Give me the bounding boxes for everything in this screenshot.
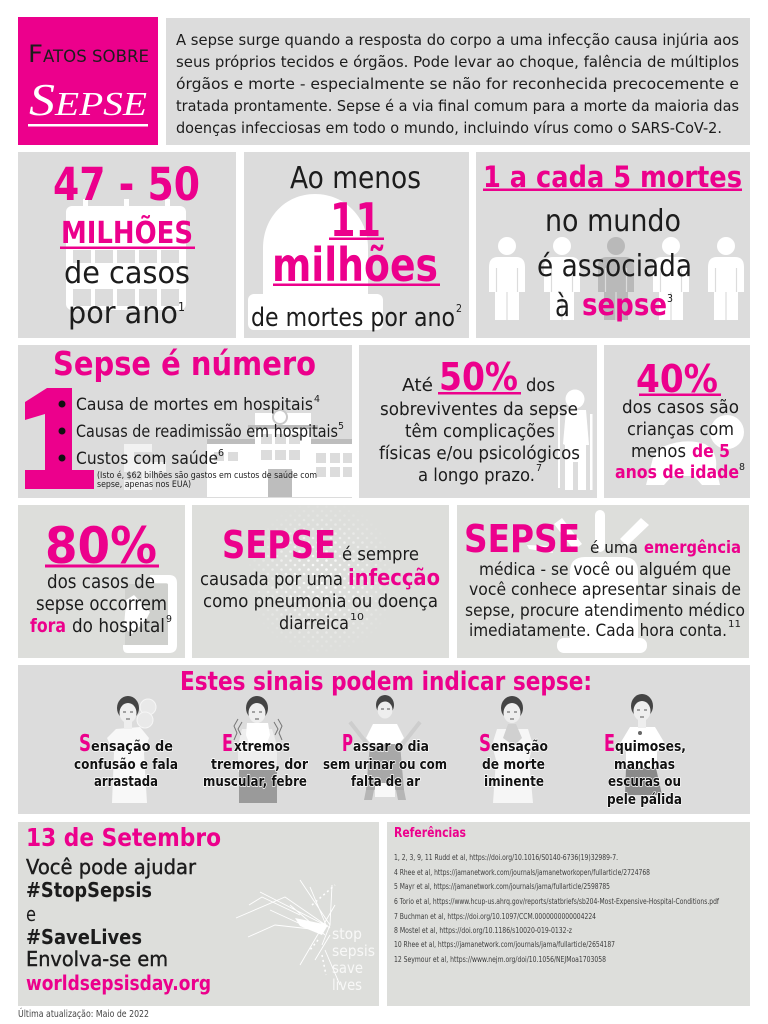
label: passar o dia: sem urinar ou com [323,757,447,773]
label: confusão: ensação de [91,739,173,755]
label: equimoses: E [604,731,615,757]
panel: Até 50% dos sobreviventes: 7 [536,463,542,474]
icon: calendar [66,199,186,310]
panel: introduction text [166,18,750,145]
panel: warning signs [18,665,750,814]
label: confusão: S [79,731,91,757]
panel: 1 a cada 5 mortes: sepse [582,288,667,323]
panel: Até 50% dos sobreviventes: têm complicações [405,421,555,442]
panel: 40% crianças: 40% [636,357,718,401]
panel: 80% fora do hospital: 9 [166,614,172,625]
label: extremos: xtremos [234,739,290,755]
panel: 40% crianças: anos de idade [615,462,739,483]
panel: 11 milhões de mortes: Ao menos [290,161,421,196]
figure: shivering [234,696,282,803]
label: passar o dia: falta de ar [351,774,421,790]
panel: 1 a cada 5 mortes: à [555,289,570,324]
panel: 80% fora do hospital [18,505,185,658]
list: ranking: 4 [314,394,320,405]
panel: Até 50% dos sobreviventes: dos [526,375,555,396]
panel: 47-50 milhões de casos: 47 - 50 [53,158,200,211]
panel: 80% fora do hospital: 80% [45,517,157,575]
panel: 1 a cada 5 mortes [476,152,750,338]
panel: 1 a cada 5 mortes: 3 [667,292,673,305]
panel: references: 10 Rhee et al, https://jamanetwork.com/journals/jama/fullarticle/2654187 [394,940,615,949]
panel: references: 5 Mayr et al, https://jamanetwork.com/journals/jama/fullarticle/2598785 [394,882,610,891]
panel: references [387,822,750,1006]
icon: five people [489,237,744,320]
icon: stop sepsis splash logo: sepsis [332,942,375,960]
panel: 40% crianças [604,345,750,498]
footer: last update: Última atualização: Maio de 2022 [18,1008,149,1020]
panel: 40% crianças: menos [631,441,686,462]
label: sensação de morte: iminente [484,774,544,790]
label: extremos [203,731,309,790]
label: extremos: muscular, febre [203,774,307,790]
panel: sepse causada por infecção: 10 [350,612,364,623]
label: equimoses: pele pálida [607,792,682,808]
label: extremos: E [222,731,233,757]
halftone dots [262,516,382,638]
title panel: Fatos sobre Sepse: ATOS SOBRE [43,47,149,67]
panel: 47-50 milhões de casos: por ano [68,296,178,331]
panel: 13 de Setembro call to action: worldsepsisday.org [26,971,211,995]
panel: Até 50% dos sobreviventes: Até [402,375,433,396]
label: sensação de morte [479,731,548,790]
panel: Até 50% dos sobreviventes: sobreviventes da sepse [380,399,578,420]
panel: 13 de Setembro call to action: #StopSepsis [26,878,152,902]
label: confusão: confusão e fala [74,757,178,773]
panel: Até 50% dos sobreviventes: a longo prazo. [418,465,535,486]
icon: phone frame [123,575,177,653]
icon: siren [527,510,649,653]
figure: impending doom [492,696,533,803]
panel: references: 4 Rhee et al, https://jamanetwork.com/journals/jamanetworkopen/fullarticle/2724768 [394,868,650,877]
panel: 11 milhões de mortes: 2 [456,302,462,315]
panel: 47-50 milhões de casos: 1 [178,300,185,314]
list: ranking: 5 [338,421,344,432]
label: equimoses [604,731,686,808]
panel: 13 de Setembro call to action: Envolva-se em [26,947,168,971]
panel: introduction text: doenças infecciosas em todo o mundo, incluindo vírus como o SARS-CoV-2. [176,119,722,137]
panel: 13 de Setembro call to action: 13 de Setembro [26,823,221,852]
panel: sepse causada por infecção: infecção [348,566,440,591]
panel: introduction text: tratada prontamente. Sepse é a via final comum para a morte da maioria das [176,97,739,115]
title panel: Fatos sobre Sepse [18,17,158,145]
panel: 1 a cada 5 mortes: 1 a cada 5 mortes [483,160,742,194]
label: sensação de morte: de morte [482,757,545,773]
panel: 80% fora do hospital: dos casos de [47,571,155,593]
panel: references: 1, 2, 3, 9, 11 Rudd et al, https://doi.org/10.1016/S0140-6736(19)32989-7. [394,853,618,862]
panel: sepse é uma emergência: é uma [590,538,638,557]
panel: sepse é uma emergência: sepse, procure atendimento médico [465,601,745,621]
panel: 1 a cada 5 mortes: é associada [537,249,692,284]
list: ranking: Causa de mortes em hospitais [76,395,313,415]
panel: 80% fora do hospital: fora [30,615,66,637]
panel: 40% crianças: crianças com [627,419,734,440]
label: passar o dia: assar o dia [353,739,429,755]
icon: stop sepsis splash logo: save [332,959,363,977]
panel: Até 50% dos sobreviventes [359,345,597,498]
icon: tombstone [248,194,383,330]
title panel: Fatos sobre Sepse: EPSE [54,86,147,123]
icon: crawling child [646,415,744,485]
panel: Até 50% dos sobreviventes: físicas e/ou psicológicos [379,443,580,464]
panel: 80% fora do hospital: sepse occorrem [36,593,167,615]
panel: 11 milhões de mortes: 11 [330,193,381,247]
panel: sepse causada por infecção: como pneumonia ou doença [203,591,438,612]
panel: introduction text: A sepse surge quando a resposta do corpo a uma infecção causa injúria aos [176,31,739,49]
panel: 47-50 milhões de casos [18,152,236,338]
figure: bruising [621,694,664,795]
panel: introduction text: órgãos e morte - especialmente se não for reconhecida precocemente e [176,75,739,93]
panel: 80% fora do hospital: do hospital [72,615,165,637]
panel: 40% crianças: de 5 [692,441,730,462]
list: ranking: (Isto é, $62 bilhões são gastos em custos de saúde com [97,470,317,481]
panel: 13 de Setembro call to action [18,822,379,1006]
label: confusão: arrastada [94,774,158,790]
panel: 13 de Setembro call to action: #SaveLives [26,925,142,949]
panel: references: Referências [394,826,466,841]
panel: Até 50% dos sobreviventes: 50% [439,355,518,399]
panel: sepse é uma emergência: SEPSE [464,517,580,561]
panel: 11 milhões de mortes: milhões [272,238,438,292]
panel: references: 12 Seymour et al, https://www.nejm.org/doi/10.1056/NEJMoa1703058 [394,955,606,964]
panel: Sepse é número 1: Sepse é número [53,344,316,383]
title panel: Fatos sobre Sepse: F [28,40,43,68]
list: ranking: 6 [218,448,224,459]
label: passar o dia [323,731,447,790]
list: ranking: Custos com saúde [76,449,218,469]
icon: person on crutches [558,390,592,490]
panel: sepse causada por infecção [192,505,449,658]
icon: hospital [124,410,352,497]
panel: sepse é uma emergência: médica - se você ou alguém que [479,560,731,580]
panel: references: 7 Buchman et al, https://doi.org/10.1097/CCM.0000000000004224 [394,912,596,921]
panel: 11 milhões de mortes [244,152,469,338]
title panel: Fatos sobre Sepse: S [29,74,55,125]
label: equimoses: quimoses, [615,739,686,755]
panel: warning signs: Estes sinais podem indicar sepse: [180,667,592,697]
panel: sepse é uma emergência: você conhece apresentar sinais de [469,580,741,600]
panel: 13 de Setembro call to action: e [26,902,36,926]
panel: introduction text: seus próprios tecidos e órgãos. Pode levar ao choque, falência de múltiplos [176,53,739,71]
label: sensação de morte: ensação [491,739,548,755]
panel: references: 8 Mostel et al, https://doi.org/10.1186/s10020-019-0132-z [394,926,572,935]
icon: stop sepsis splash logo: stop [332,925,362,943]
panel: 47-50 milhões de casos: MILHÕES [61,214,193,251]
panel: sepse causada por infecção: SEPSE [222,523,336,567]
panel: 13 de Setembro call to action: Você pode ajudar [26,855,197,879]
panel: 1 a cada 5 mortes: no mundo [545,204,681,239]
panel: 11 milhões de mortes: de mortes por ano [251,303,455,333]
label: equimoses: manchas [614,757,675,773]
list: ranking [58,394,344,490]
label: sensação de morte: S [479,731,491,757]
label: equimoses: escuras ou [608,774,681,790]
icon: stop sepsis splash logo: lives [332,976,362,994]
list: ranking: Causas de readimissão em hospitais [76,422,338,442]
icon: stop sepsis splash logo [236,880,375,994]
label: confusão [74,731,178,790]
panel: sepse causada por infecção: diarreica [279,613,349,634]
panel: sepse é uma emergência: emergência [644,538,741,558]
panel: sepse é uma emergência [457,505,749,658]
list: ranking: sepse, apenas nos EUA) [97,480,191,490]
panel: sepse é uma emergência: imediatamente. Cada hora conta. [469,621,727,641]
big number 1 [25,388,94,489]
panel: sepse causada por infecção: causada por uma [200,569,343,590]
panel: sepse é uma emergência: 11 [728,619,741,630]
panel: 40% crianças: 8 [739,462,745,473]
label: passar o dia: P [342,731,353,757]
figure: no urination [350,695,420,800]
panel: 40% crianças: dos casos são [622,397,739,418]
figure: confusion [107,696,156,803]
label: extremos: tremores, dor [211,757,309,773]
panel: sepse causada por infecção: é sempre [342,544,419,565]
panel: Sepse é número 1 [18,344,352,498]
panel: 47-50 milhões de casos: de casos [64,256,190,291]
